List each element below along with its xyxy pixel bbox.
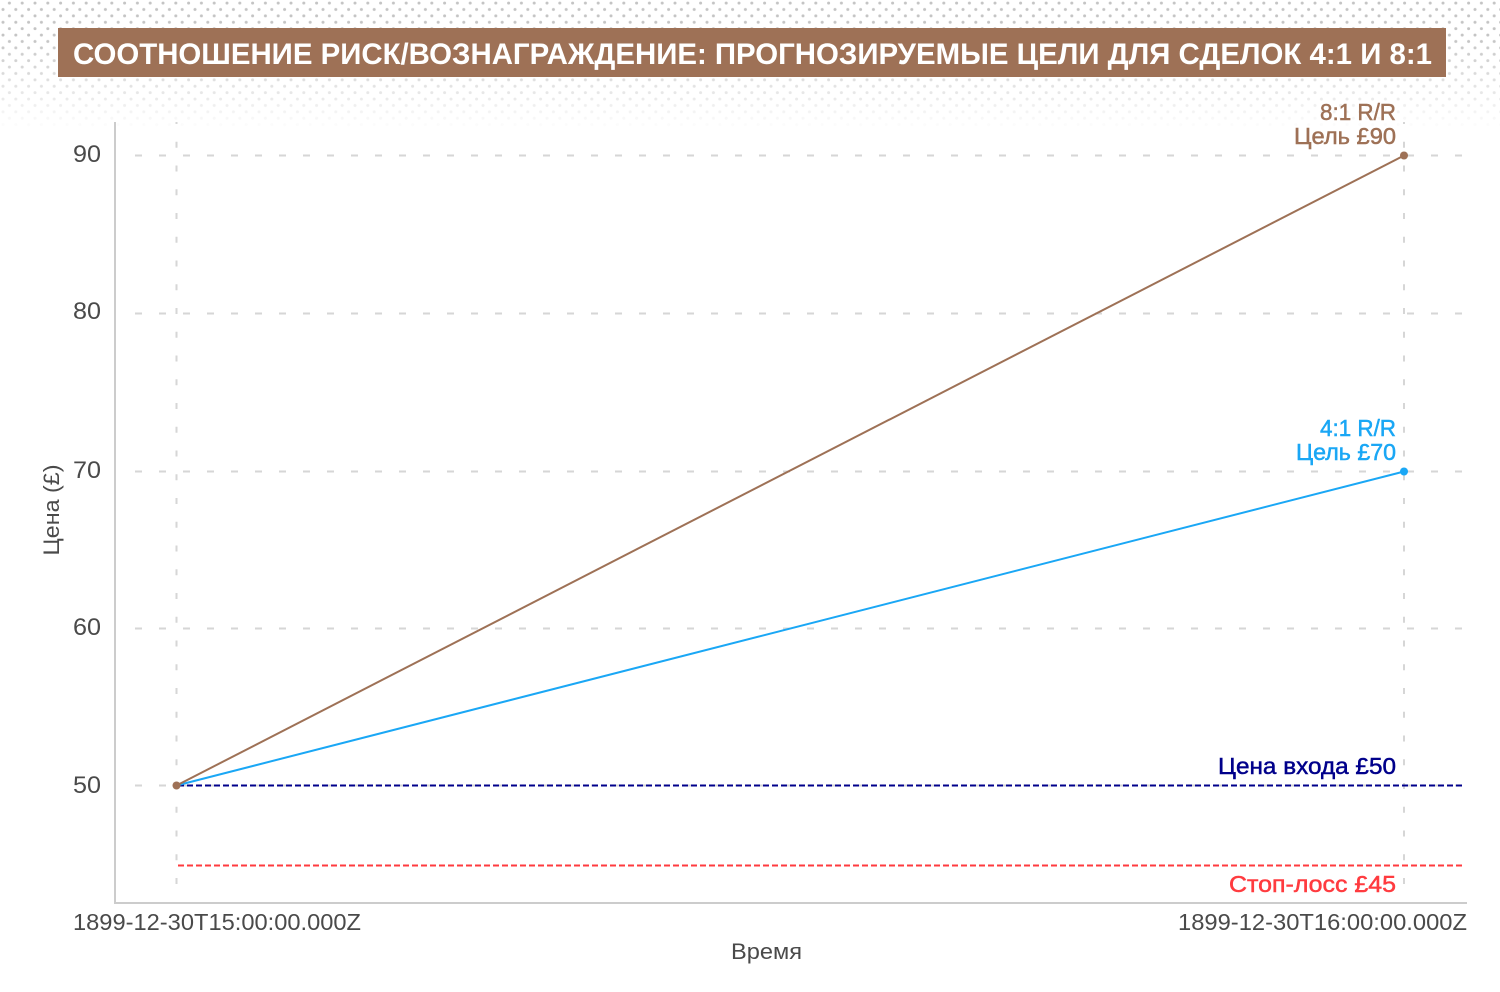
stop loss line: [178, 864, 1465, 866]
x axis tick labels: [73, 909, 1467, 935]
axes: [114, 122, 1467, 903]
annotation: 4:1 target: 4:1 R/R: [1320, 415, 1396, 441]
annotation: 8:1 target: 8:1 R/R: [1320, 99, 1396, 125]
y axis tick labels: [73, 141, 101, 799]
y axis title: Цена (£): [39, 464, 64, 556]
y axis tick labels: 70: [73, 457, 101, 484]
x axis tick labels: 1899-12-30T16:00:00.000Z: [1178, 909, 1467, 935]
y axis tick labels: 60: [73, 614, 101, 641]
4:1 series line: [176, 468, 1408, 786]
entry price line: [178, 784, 1465, 786]
annotation: entry price: Цена входа £50: [1218, 753, 1396, 779]
annotation: 8:1 target: Цель £90: [1294, 123, 1396, 149]
8:1 series line: [172, 152, 1408, 790]
title: СООТНОШЕНИЕ РИСК/ВОЗНАГРАЖДЕНИЕ: ПРОГНОЗИРУЕМЫЕ ЦЕЛИ ДЛЯ СДЕЛОК 4:1 И 8:1: [73, 38, 1432, 71]
annotation: 8:1 target: [1294, 99, 1396, 149]
x axis tick labels: 1899-12-30T15:00:00.000Z: [73, 909, 361, 935]
y axis tick labels: 80: [73, 298, 101, 325]
x axis title: Время: [731, 939, 802, 964]
annotation: stop loss: Стоп-лосс £45: [1229, 871, 1396, 897]
annotation: 4:1 target: Цель £70: [1296, 439, 1396, 465]
title: [58, 28, 1446, 77]
annotation: 4:1 target: [1296, 415, 1396, 465]
y axis tick labels: 90: [73, 141, 101, 168]
y axis tick labels: 50: [73, 772, 101, 799]
